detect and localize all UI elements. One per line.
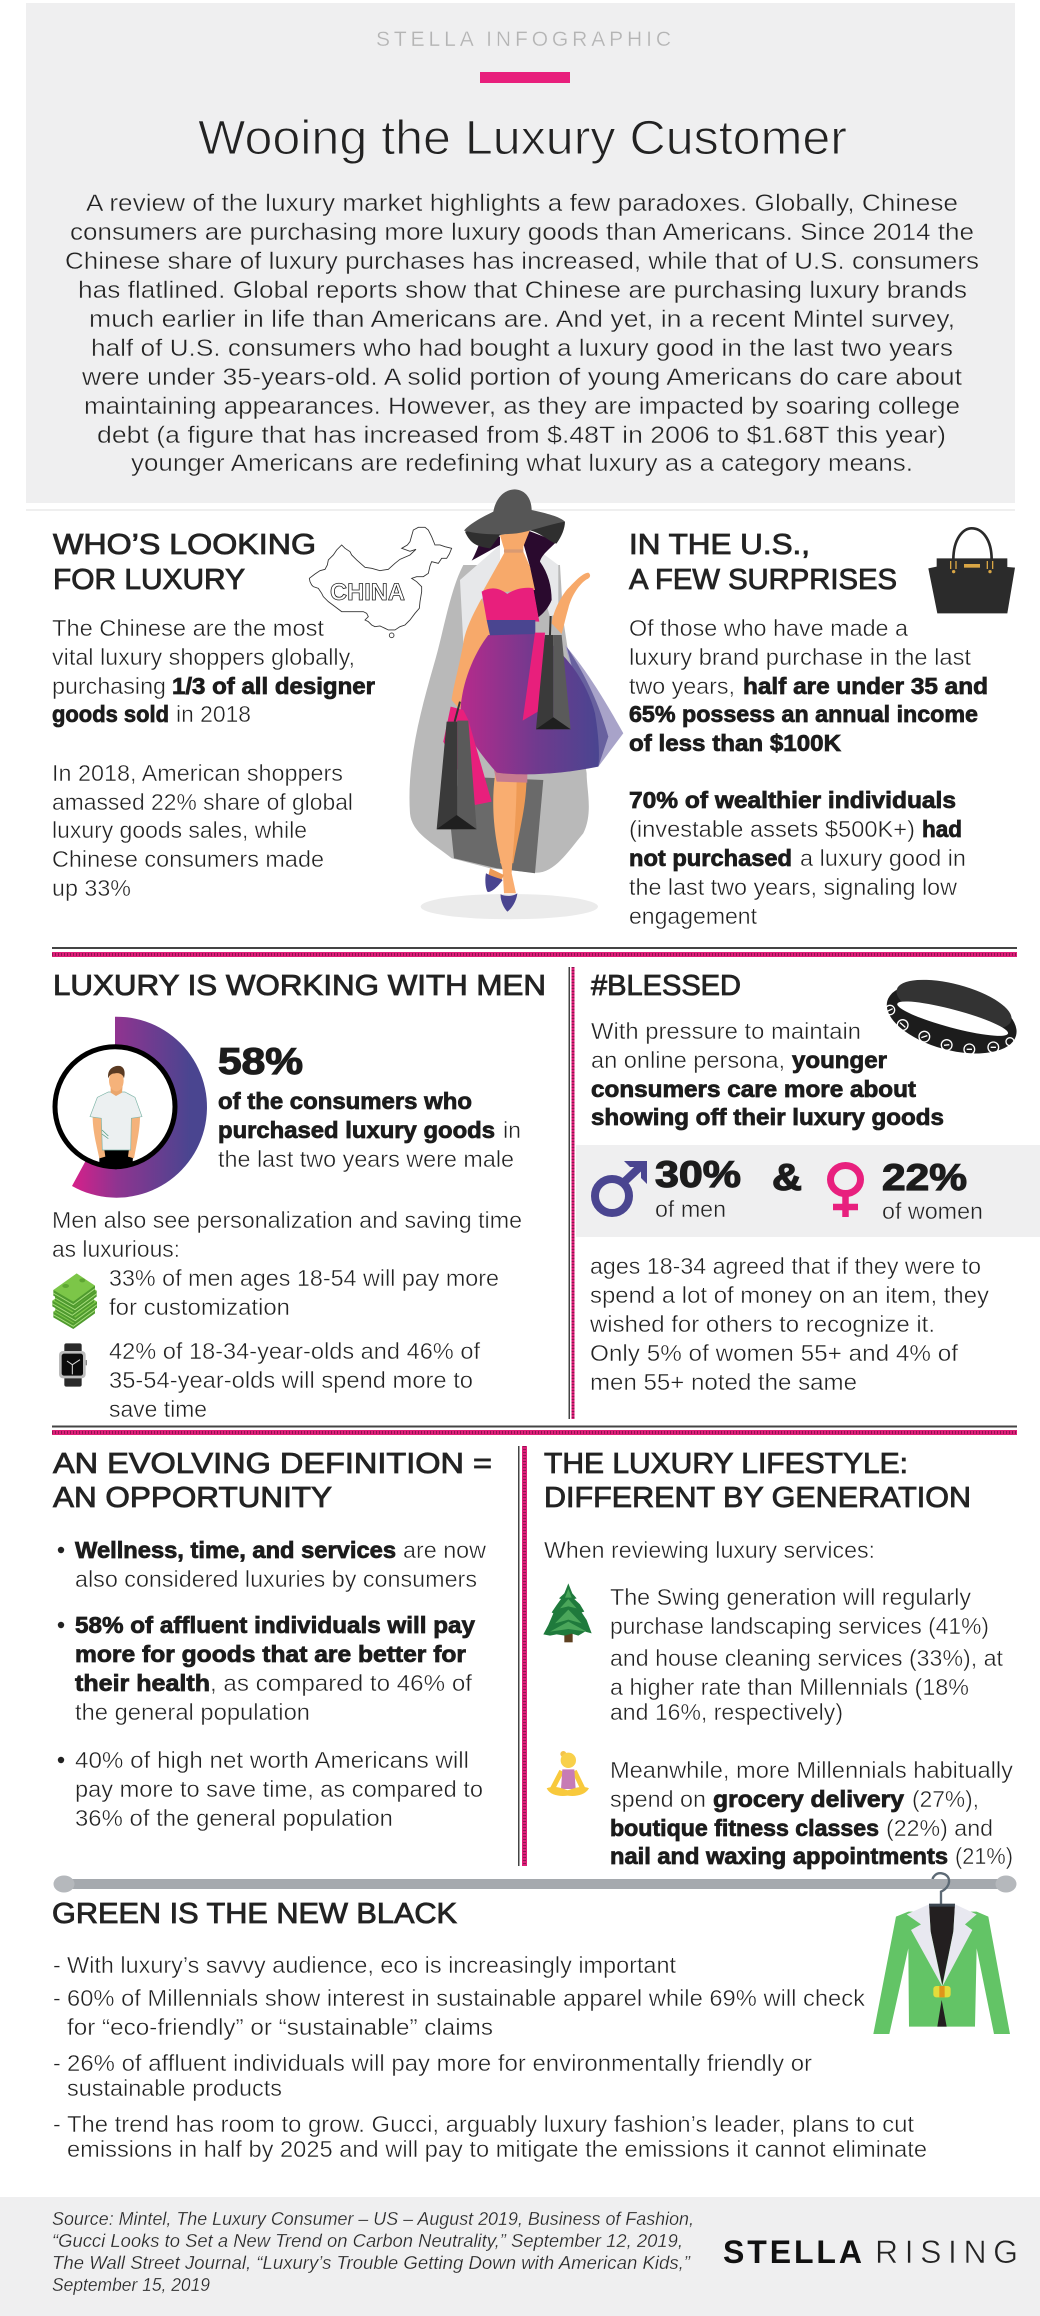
heading: IN THE U.S.,	[629, 529, 810, 561]
text: millennials: grocery delivery	[713, 1786, 904, 1812]
text: millennials: (22%) and	[886, 1815, 993, 1841]
text: American shoppers: amassed 22% share of global	[52, 789, 353, 815]
text: Chinese shoppers: vital luxury shoppers globally,	[52, 644, 355, 670]
icon: smart watch	[59, 1343, 87, 1387]
intro paragraph: much earlier in life than Americans are. And yet, in a recent Mintel survey,	[89, 306, 955, 333]
text: American shoppers: In 2018, American shoppers	[52, 760, 343, 786]
text: male consumers: purchased luxury goods	[218, 1117, 495, 1143]
right shopping bag	[523, 616, 571, 729]
text: online persona: showing off their luxury goods	[591, 1104, 944, 1130]
bullet: millennials: for “eco-friendly” or “sustainable” claims	[67, 2014, 493, 2040]
text: wealthier individuals: engagement	[629, 903, 758, 929]
bullet: wellness: are now	[403, 1537, 486, 1563]
text: saving time: save time	[109, 1396, 207, 1422]
text: male consumers	[218, 1088, 521, 1172]
stat: 22% of women: 22%	[882, 1157, 967, 1198]
text: Chinese shoppers: in 2018	[176, 701, 251, 727]
bullet: millennials: -	[53, 1985, 61, 2011]
intro paragraph: were under 35-years-old. A solid portion of young Americans do care about	[81, 364, 962, 391]
text: under 35: two years,	[629, 673, 735, 699]
stat: 22% of women	[882, 1157, 983, 1224]
intro paragraph: half of U.S. consumers who had bought a luxury good in the last two years	[91, 335, 953, 362]
icon: yoga woman	[547, 1751, 589, 1796]
stat: 30% of men: 30%	[655, 1154, 741, 1195]
bullet: high net worth: 36% of the general population	[75, 1805, 393, 1831]
text: under 35: half are under 35 and	[743, 673, 988, 699]
clothes rail	[54, 1876, 1016, 1892]
text: American shoppers	[52, 760, 353, 901]
text: under 35	[629, 615, 988, 756]
bullet: wellness: Wellness, time, and services	[75, 1537, 396, 1563]
heading: AN EVOLVING DEFINITION =	[53, 1448, 492, 1480]
intro paragraph: consumers are purchasing more luxury goods than Americans. Since 2014 the	[70, 219, 974, 246]
text: recognition	[589, 1253, 990, 1395]
coat	[409, 542, 589, 873]
text: reviewing services: When reviewing luxury services:	[544, 1537, 875, 1563]
bullet: Gucci	[53, 2111, 927, 2162]
text: millennials: (27%),	[912, 1786, 979, 1812]
title: Wooing the Luxury Customer	[198, 112, 847, 165]
intro paragraph	[65, 190, 979, 477]
ampersand: &	[772, 1157, 802, 1198]
front leg	[493, 775, 517, 893]
icon: male symbol	[595, 1161, 647, 1213]
heading	[629, 529, 897, 596]
icon: man in white tee	[90, 1066, 142, 1169]
logo: Stella Rising	[723, 2234, 1018, 2270]
left shopping bag	[437, 702, 492, 829]
logo: Stella Rising: RISING	[875, 2234, 1018, 2270]
intro paragraph: has flatlined. Global reports show that Chinese are purchasing luxury brands	[78, 277, 967, 304]
bullet: affluent	[53, 2050, 812, 2101]
text: under 35: 65% possess an annual income	[629, 701, 978, 727]
bullet: high net worth	[58, 1747, 483, 1831]
stat: 22% of women: of women	[882, 1198, 983, 1224]
hat	[464, 489, 565, 548]
bullet: affluent health: 58% of affluent individuals will pay	[75, 1612, 475, 1638]
right arm	[552, 573, 590, 634]
panel: in the U.S.	[629, 529, 988, 929]
stat: 58%: 58%	[218, 1041, 303, 1082]
text: swing generation	[610, 1584, 1004, 1725]
panel: luxury is working with men	[52, 970, 546, 1422]
text: wealthier individuals	[629, 787, 966, 929]
text: wealthier individuals: had	[922, 816, 962, 842]
source text: Source: Mintel, The Luxury Consumer – US – August 2019, Business of Fashion,	[52, 2208, 694, 2229]
text: recognition: wished for others to recognize it.	[589, 1311, 935, 1337]
source text: The Wall Street Journal, “Luxury’s Trouble Getting Down with American Kids,”	[52, 2252, 691, 2273]
panel: who's looking for luxury	[52, 529, 375, 901]
text: wealthier individuals: a luxury good in	[800, 845, 966, 871]
left arm	[452, 598, 491, 710]
text: Chinese shoppers: 1/3 of all designer	[172, 673, 375, 699]
text: swing generation: a higher rate than Millennials (18%	[610, 1674, 969, 1700]
belt	[487, 620, 535, 635]
text: American shoppers: luxury goods sales, while	[52, 817, 307, 843]
bullet: Gucci: -	[53, 2111, 61, 2137]
text: Chinese shoppers: The Chinese are the most	[52, 615, 325, 641]
icon: China map: CHINA	[330, 579, 405, 606]
accent bar	[480, 72, 570, 83]
stat: 30% of men: of men	[655, 1196, 726, 1222]
text: swing generation: purchase landscaping services (41%)	[610, 1613, 989, 1639]
text: personalization intro: as luxurious:	[52, 1236, 180, 1262]
intro paragraph: A review of the luxury market highlights a few paradoxes. Globally, Chinese	[86, 190, 958, 217]
icon: female symbol	[830, 1166, 860, 1217]
icon: bracelet	[879, 970, 1024, 1066]
text: millennials: spend on	[610, 1786, 706, 1812]
text: under 35: of less than $100K	[629, 730, 841, 756]
stat: 30% of men	[655, 1154, 741, 1222]
donut chart: 58% male	[55, 1017, 207, 1198]
text: online persona	[591, 1018, 944, 1130]
source text	[52, 2208, 694, 2295]
bullet: high net worth: pay more to save time, as compared to	[75, 1776, 483, 1802]
bullet: millennials: 60% of Millennials show interest in sustainable apparel while 69% will check	[67, 1985, 866, 2011]
heading	[53, 1448, 492, 1514]
panel: the luxury lifestyle	[543, 1448, 1014, 1869]
heading: WHO’S LOOKING	[53, 529, 316, 561]
heading	[544, 1448, 971, 1514]
text: American shoppers: up 33%	[52, 875, 131, 901]
heading: THE LUXURY LIFESTYLE:	[544, 1448, 908, 1480]
bullet: affluent: -	[53, 2050, 61, 2076]
text: under 35: Of those who have made a	[629, 615, 908, 641]
text: Chinese shoppers: goods sold	[52, 701, 169, 727]
text: online persona: consumers care more about	[591, 1076, 916, 1102]
under skirt	[494, 770, 527, 783]
bullet: eco: With luxury’s savvy audience, eco is increasingly important	[67, 1952, 677, 1978]
text: online persona: younger	[792, 1047, 887, 1073]
bullet: high net worth: 40% of high net worth Americans will	[75, 1747, 469, 1773]
heading: AN OPPORTUNITY	[53, 1482, 332, 1514]
heading: #BLESSED	[591, 970, 741, 1002]
text: millennials: (21%)	[955, 1843, 1013, 1869]
text: Chinese shoppers: purchasing	[52, 673, 166, 699]
ground shadow	[421, 894, 598, 919]
body skin	[482, 530, 535, 593]
bullet: affluent health: their health	[75, 1670, 210, 1696]
bullet: wellness: also considered luxuries by consumers	[75, 1566, 477, 1592]
bullet: affluent: sustainable products	[67, 2075, 282, 2101]
text: swing generation: and 16%, respectively)	[610, 1699, 843, 1725]
source text: September 15, 2019	[52, 2274, 210, 2295]
icon: pine tree	[543, 1583, 592, 1642]
panel: #blessed	[576, 970, 1040, 1395]
bullet: Gucci: The trend has room to grow. Gucci, arguably luxury fashion’s leader, plans to cut	[67, 2111, 915, 2137]
bullet: affluent health: the general population	[75, 1699, 310, 1725]
heading: GREEN IS THE NEW BLACK	[52, 1898, 457, 1930]
text: wealthier individuals: 70% of wealthier individuals	[629, 787, 956, 813]
panel: green is the new black	[52, 1898, 927, 2162]
skirt	[461, 633, 599, 774]
text: wealthier individuals: not purchased	[629, 845, 792, 871]
text: millennials	[610, 1757, 1014, 1869]
icon: handbag	[928, 528, 1015, 613]
text: customization: for customization	[109, 1294, 290, 1320]
text: wealthier individuals: (investable assets $500K+)	[629, 816, 915, 842]
heading	[53, 529, 316, 596]
heading: LUXURY IS WORKING WITH MEN	[53, 970, 546, 1002]
icon: China map	[309, 527, 452, 638]
bullet: affluent health	[58, 1612, 475, 1725]
text: personalization intro: Men also see personalization and saving time	[52, 1207, 522, 1233]
text: male consumers: of the consumers who	[218, 1088, 472, 1114]
bullet: Gucci: emissions in half by 2025 and will pay to mitigate the emissions it cannot eliminate	[67, 2136, 927, 2162]
text: millennials: Meanwhile, more Millennials habitually	[610, 1757, 1014, 1783]
eyebrow: Stella Infographic: STELLA INFOGRAPHIC	[376, 28, 671, 51]
dress bodice	[482, 588, 539, 622]
text: millennials: boutique fitness classes	[610, 1815, 879, 1841]
panel: an evolving definition	[53, 1448, 492, 1831]
text: swing generation: The Swing generation will regularly	[610, 1584, 971, 1610]
text: recognition: men 55+ noted the same	[590, 1369, 857, 1395]
footer	[0, 2197, 1040, 2316]
bullet: millennials	[53, 1985, 866, 2040]
text: recognition: ages 18-34 agreed that if they were to	[590, 1253, 981, 1279]
text: customization: 33% of men ages 18-54 will pay more	[109, 1265, 499, 1291]
text: millennials: nail and waxing appointments	[610, 1843, 948, 1869]
text: saving time	[109, 1338, 481, 1422]
heading: DIFFERENT BY GENERATION	[544, 1482, 971, 1514]
source text: “Gucci Looks to Set a New Trend on Carbon Neutrality,” September 12, 2019,	[52, 2230, 683, 2251]
text: online persona: With pressure to maintain	[591, 1018, 861, 1044]
text: male consumers: the last two years were male	[218, 1146, 514, 1172]
heading: FOR LUXURY	[53, 564, 245, 596]
bullet: eco: -	[53, 1952, 61, 1978]
heading: A FEW SURPRISES	[629, 564, 897, 596]
panel: gender stats band	[576, 1145, 1040, 1237]
logo: Stella Rising: STELLA	[723, 2234, 862, 2270]
bullet: affluent health: more for goods that are better for	[75, 1641, 466, 1667]
intro paragraph: maintaining appearances. However, as they are impacted by soaring college	[84, 393, 960, 420]
bullet: affluent: 26% of affluent individuals will pay more for environmentally friendly or	[67, 2050, 812, 2076]
panel: intro	[26, 3, 1015, 503]
shoes	[485, 873, 517, 912]
intro paragraph: Chinese share of luxury purchases has increased, while that of U.S. consumers	[65, 248, 979, 275]
icon: green jacket on hanger	[873, 1873, 1010, 2034]
text: recognition: Only 5% of women 55+ and 4% of	[590, 1340, 959, 1366]
bullet: wellness	[58, 1537, 486, 1592]
intro paragraph: younger Americans are redefining what luxury as a category means.	[131, 450, 913, 477]
text: under 35: luxury brand purchase in the last	[629, 644, 972, 670]
text: swing generation: and house cleaning services (33%), at	[610, 1645, 1004, 1671]
back leg	[500, 773, 527, 863]
bullet: affluent health: , as compared to 46% of	[210, 1670, 473, 1696]
text: male consumers: in	[503, 1117, 521, 1143]
text: online persona: an online persona,	[591, 1047, 785, 1073]
text: recognition: spend a lot of money on an item, they	[590, 1282, 990, 1308]
hair	[472, 530, 557, 617]
translucent overskirt	[565, 645, 623, 767]
icon: money stack	[52, 1273, 97, 1329]
text: American shoppers: Chinese consumers made	[52, 846, 324, 872]
text: saving time: 42% of 18-34-year-olds and 46% of	[109, 1338, 481, 1364]
text: saving time: 35-54-year-olds will spend more to	[109, 1367, 473, 1393]
text: Chinese shoppers	[52, 615, 375, 727]
text: customization	[109, 1265, 499, 1320]
text: personalization intro	[52, 1207, 522, 1262]
illustration: woman with shopping bags	[409, 489, 623, 919]
intro paragraph: debt (a figure that has increased from $.48T in 2006 to $1.68T this year)	[97, 422, 946, 449]
text: wealthier individuals: the last two years, signaling low	[629, 874, 957, 900]
